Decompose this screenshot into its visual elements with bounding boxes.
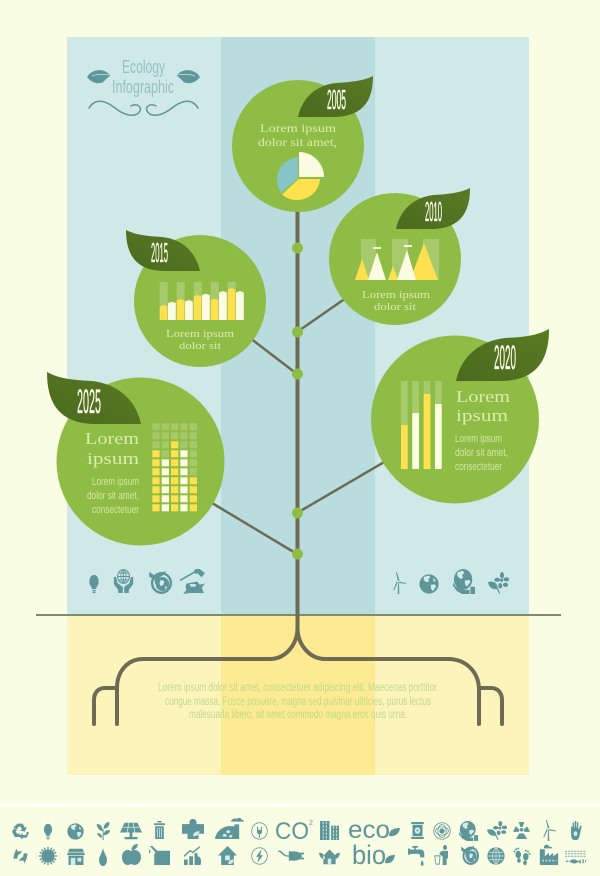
panel: soil columns (67, 615, 529, 775)
tree trunk and roots (94, 205, 502, 724)
icon: factory (540, 845, 558, 865)
bar chart (160, 282, 244, 320)
icon: power plug (278, 851, 304, 861)
flourish (89, 101, 198, 115)
body text: congue massa. Fusce posuere, magna sed pulvinar ultricies, purus lectus (165, 696, 431, 708)
leaf badge (126, 230, 200, 271)
description: dolor sit amet, (455, 447, 508, 459)
icon: water drop (99, 848, 107, 866)
leaf badge (456, 329, 549, 381)
icon: hand (571, 821, 582, 840)
description: consectetuer (455, 461, 502, 473)
icon: sprout (97, 822, 110, 840)
text: bio: bio (352, 840, 386, 870)
description: Lorem ipsum (455, 433, 502, 445)
leaf badge (47, 372, 141, 424)
circle (329, 193, 461, 325)
block grid chart (152, 423, 197, 511)
panel: 2015: 2015 (151, 237, 168, 268)
icon: sun (39, 847, 57, 865)
icon: wind turbine (393, 572, 406, 594)
panel: 2005: 2005 (327, 84, 346, 115)
description (87, 476, 139, 516)
pie chart (277, 152, 324, 200)
heading text (112, 57, 174, 97)
icon: refresh arrows (14, 849, 27, 863)
icon: flower (487, 821, 507, 840)
icon: bolt in circle (252, 848, 267, 864)
label: Lorem ipsum (260, 123, 336, 135)
icon: growth chart (184, 847, 201, 865)
leaf badge (298, 76, 373, 117)
icon: bulb (44, 824, 52, 839)
icon: eco house (218, 846, 237, 865)
body text: malesuada libero, sit amet commodo magna eros quis urna. (189, 709, 407, 721)
tree nodes (292, 242, 303, 560)
label (258, 123, 337, 149)
title (87, 57, 200, 115)
icon: axe and stump (180, 568, 205, 594)
icon: right leaf (177, 70, 200, 83)
panel: 2025: 2025 (77, 383, 101, 421)
circle (232, 80, 364, 212)
icon: solar panel (120, 823, 142, 839)
footer divider (0, 803, 600, 807)
icon row: right cluster (393, 569, 509, 594)
icon: turbine (543, 820, 556, 841)
description: consectetuer (92, 504, 139, 516)
icon: globe with hand (459, 821, 478, 841)
panel: 2010 (329, 188, 470, 325)
label: dolor sit (374, 302, 416, 313)
panel: 2010: 2010 (425, 196, 442, 227)
icon: house with leaves (319, 849, 340, 864)
icon: buildings (320, 821, 339, 840)
icon: person with bin (435, 845, 448, 865)
icon: puzzle (182, 819, 204, 839)
label: Lorem ipsum (362, 290, 430, 301)
icon: footprints (514, 848, 530, 865)
heading: Lorem (456, 387, 510, 406)
icon: bio leaf (385, 855, 395, 863)
icon: oil can (149, 845, 170, 865)
icon: atom (434, 823, 450, 839)
panel: 2025 (47, 372, 224, 546)
icon: light bulb (89, 575, 99, 593)
text: CO2: 2 (309, 820, 313, 827)
description: Lorem ipsum (92, 476, 139, 488)
text: CO2: CO (275, 818, 309, 845)
icon: nuclear plant (215, 818, 244, 839)
heading: ipsum (87, 449, 139, 468)
text: eco: eco (348, 816, 390, 844)
icon: plane and globe (149, 571, 172, 594)
description: dolor sit amet, (87, 490, 139, 502)
label (166, 329, 234, 352)
ground line (36, 614, 561, 616)
circle (56, 378, 224, 546)
icon: wire globe (487, 847, 505, 865)
leaf badge (396, 188, 470, 229)
icon: fish in water (565, 851, 586, 864)
heading: ipsum (456, 406, 508, 425)
icon: barrel (411, 822, 424, 839)
icon: globe (419, 574, 439, 594)
icon: flower (488, 572, 509, 594)
heading (456, 387, 510, 425)
icon: radiation (513, 822, 530, 839)
icon: hands holding globe (114, 570, 133, 593)
panel: sky columns (67, 37, 529, 615)
panel: 2020: 2020 (494, 339, 516, 377)
circle (371, 336, 539, 504)
icon: globe (67, 823, 84, 840)
icon: eco leaf (389, 828, 400, 836)
panel: 2015 (126, 230, 266, 367)
branches (212, 298, 386, 554)
icon: recycle (12, 824, 29, 840)
label: dolor sit (179, 341, 221, 352)
triangle chart (355, 239, 439, 280)
panel: 2005 (232, 76, 373, 212)
heading text: Infographic (112, 77, 174, 97)
icon row: left cluster (89, 568, 205, 594)
body text: Lorem ipsum dolor sit amet, consectetuer adipiscing elit. Maecenas porttitor (158, 682, 437, 694)
panel: 2020 (371, 329, 549, 504)
bar chart (401, 381, 442, 469)
icon: trash (154, 821, 165, 839)
footer icon set (12, 816, 586, 870)
heading text: Ecology (122, 57, 165, 77)
label: Lorem ipsum (166, 329, 234, 340)
icon: plug in circle (252, 823, 267, 839)
label: dolor sit amet, (258, 137, 337, 149)
icon: apple (122, 844, 141, 865)
icon: shop (67, 849, 85, 865)
description (455, 433, 508, 473)
icon: plane globe (461, 846, 479, 865)
icon: tap (408, 846, 424, 866)
icon: left leaf (87, 70, 110, 83)
heading: Lorem (85, 429, 139, 448)
circle (134, 235, 266, 367)
body text (158, 682, 437, 721)
icon: globe in hand (453, 569, 475, 594)
heading (85, 429, 139, 468)
label (362, 290, 430, 313)
